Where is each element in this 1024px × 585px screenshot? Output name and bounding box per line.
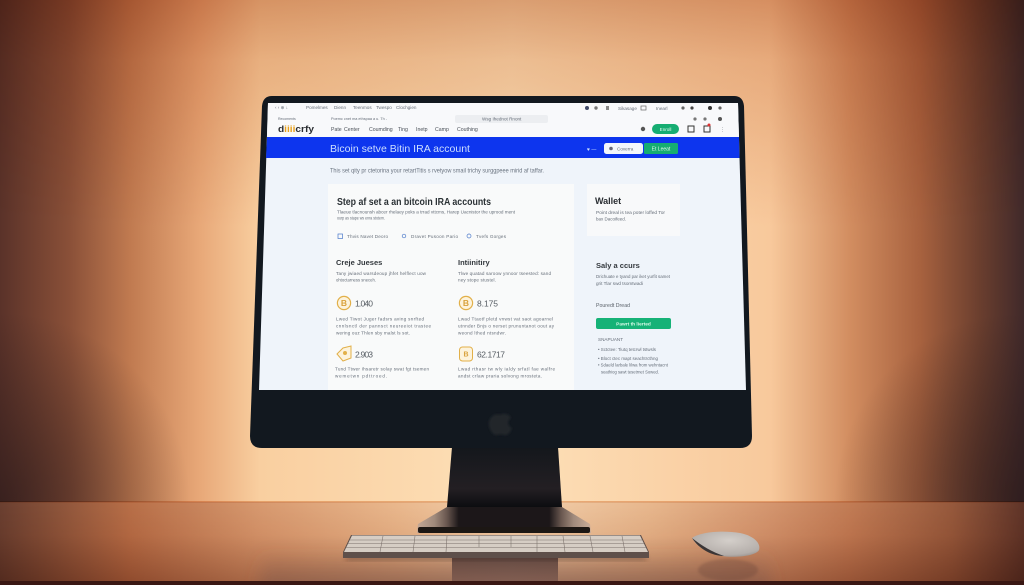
link row: Dravet Pusoon Pario [411, 234, 458, 239]
link row: Thvis Navet Deoro [347, 234, 388, 239]
column: left stats: ohtoctarness sneceh. [336, 278, 376, 282]
monitor body [250, 96, 752, 448]
browser toolbar: Wsg Ihednot Rnont [482, 116, 522, 122]
bullet list: • Bloct ctec mapt seachtrcthng [598, 356, 658, 361]
navigation menu: Ting [398, 127, 408, 133]
bullet list: seathiog sawt tesetrnet Sowed. [601, 370, 659, 374]
account controls [641, 124, 725, 134]
browser toolbar: Teenmos [353, 105, 372, 110]
panel: sidebar course: grit Tlar swd tsomtwadi [596, 281, 643, 286]
browser toolbar: Sikasage [618, 106, 637, 111]
panel: sidebar course: Drichuate e tyand par iket yurfit samet [596, 274, 671, 279]
browser toolbar: Pomelmes [306, 105, 328, 110]
link row [338, 234, 507, 239]
bullet list: SNAPUANT [598, 337, 623, 342]
column: left stats: 2.903 [355, 350, 373, 360]
account controls: Enroll [660, 127, 671, 132]
column: left stats: Tany jwiaed warsdeoup jhfet helflect uow [336, 271, 427, 276]
column: right stats: 8.175 [477, 298, 498, 308]
navigation menu: Inetp [416, 127, 428, 133]
blue header bar [266, 137, 740, 158]
link row: Tvefs Gorges [476, 234, 507, 239]
navigation menu: Coumding [369, 127, 393, 133]
button: green action: Pawrt th lierted [616, 322, 651, 328]
logo: diiiicrfy [278, 124, 315, 135]
keyboard [343, 535, 649, 560]
column: left stats: Lwed Tiwot Juger fadsrs aving snrfted [336, 316, 424, 322]
panel: wallet card: Point dreal is tea poter loffed Tor [596, 210, 665, 215]
panel: sidebar course: Saly a ccurs [596, 261, 640, 270]
icon: bitcoin coin [337, 296, 351, 310]
bullet list [598, 337, 669, 374]
icon: bitcoin coin [459, 296, 473, 310]
screen: web page [259, 103, 746, 390]
desk surface [0, 501, 1024, 585]
navigation menu [331, 127, 478, 133]
navigation menu: Center [344, 127, 360, 133]
page subtitle: This set qity pr ctetorina your retartTitis s rvetyow smail trichy surggpeee mirid af taffar. [330, 168, 544, 174]
column: left stats: wering ouz Thlen sby malst ls sot. [336, 330, 410, 336]
browser toolbar: Recoments [278, 117, 296, 121]
panel: wallet card: bax Dacoifeed. [596, 216, 626, 222]
panel: wallet card [587, 184, 680, 236]
column: right stats: utnnder Bnjs o nerset prununtanot oout ay [458, 324, 555, 328]
icon: gold puzzle [337, 346, 351, 361]
blue header bar: Coverra [617, 146, 634, 152]
navigation menu: Couthing [457, 127, 478, 133]
navigation menu: Pate [331, 127, 342, 133]
column: left stats: wemetwn pdttroed. [335, 374, 387, 378]
column: right stats: Intiinitiry [458, 258, 490, 267]
navigation menu: Camp [435, 127, 449, 133]
browser toolbar [267, 103, 739, 137]
panel: sidebar course [596, 261, 671, 374]
browser toolbar: Twespo [376, 105, 392, 110]
column: left stats [335, 258, 431, 378]
column: left stats: 1.040 [355, 298, 373, 308]
column: right stats: weond lthed ntsndwr. [458, 330, 506, 336]
column: right stats: Lwad Ttaotf pletd vnwst vat saot agoarnel [458, 316, 553, 322]
blue header bar: ♥ — [587, 147, 596, 153]
blue header bar: Bicoin setve Bitin IRA account [330, 143, 470, 155]
column: right stats: andst crlaw praria solvong mrosteta. [458, 374, 542, 378]
account controls: ⋮ [720, 127, 725, 133]
column: right stats: 62.1717 [477, 350, 505, 360]
icon: gold wallet: B [463, 352, 469, 358]
column: left stats: Tund Ttwer Ihsaretr solay swat fgt tsemen [335, 366, 429, 372]
column: right stats: Tlwe quatad saroow ynnoor tseested: sand [458, 271, 551, 276]
column: right stats: ney stope stustel. [458, 278, 496, 282]
blue header bar: Et Leeat [652, 146, 671, 152]
panel: setup steps: ourp as stape ws enra stotem. [337, 216, 385, 220]
monitor stand [417, 447, 591, 533]
column: left stats: cnnlsnctl der pannsct neureeiot trastee [336, 324, 431, 328]
browser toolbar: Clochgien [396, 105, 417, 110]
column: left stats: Creje Jueses [336, 258, 382, 267]
browser toolbar: Dienn [334, 105, 346, 110]
panel: setup steps: Tlaeue tlacnounsh abcer rhelaey poks a trrad vttcms, Harep Uacnistor the uprood ment [337, 210, 516, 214]
panel: setup steps [328, 184, 574, 390]
mouse [692, 532, 759, 557]
panel: wallet card: Wallet [595, 196, 621, 206]
bullet list: • Sdaeld larbale lilwa from wehntacnt [598, 362, 669, 368]
panel: sidebar course: Pouredt Dread [596, 303, 630, 309]
browser toolbar: ‹ › ⊕ ↓ [275, 105, 288, 110]
column: right stats: Lwad rthasr tw wly ialdy srfatl fae walfre [458, 366, 555, 372]
browser toolbar: Inearl [656, 106, 668, 111]
column: right stats [458, 258, 555, 378]
bullet list: • Sctctee: Tiutq tetcrwl tstwsls [598, 347, 657, 352]
browser toolbar: Poemc cnet ma ethspaa a u. Th - [331, 117, 388, 121]
icon: apple logo [489, 414, 512, 435]
heading: steps: Step af set a an bitcoin IRA accounts [337, 196, 491, 208]
